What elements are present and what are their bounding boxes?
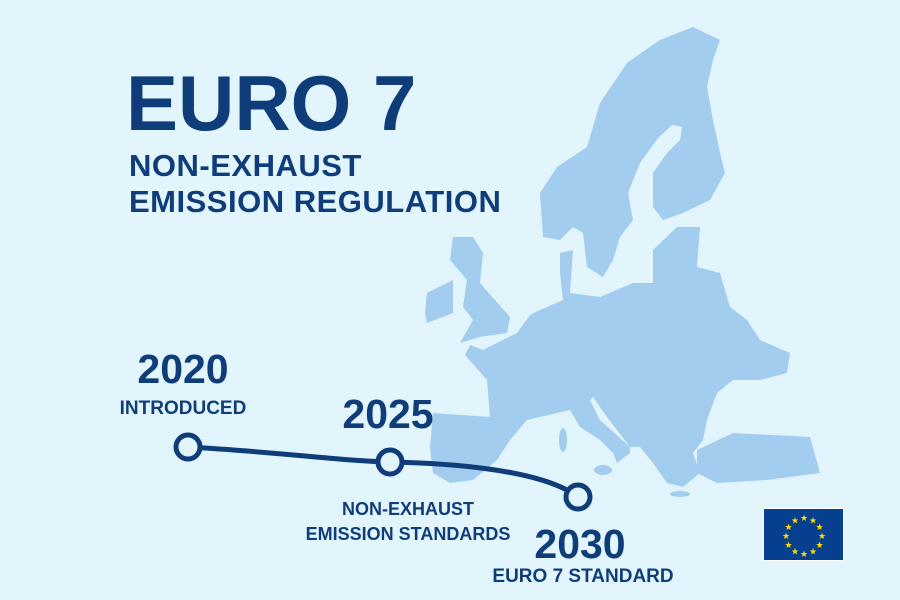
title: EURO 7 <box>126 59 416 147</box>
icon: EU flag: ★ <box>815 541 824 551</box>
label euro 7 standard: EURO 7 STANDARD <box>492 566 674 587</box>
icon: EU flag: ★ <box>809 516 817 526</box>
icon: EU flag: ★ <box>800 550 808 560</box>
label 2020 <box>120 346 246 419</box>
icon: EU flag: ★ <box>784 523 793 533</box>
icon: EU flag: ★ <box>818 532 826 542</box>
icon: EU flag <box>763 508 844 561</box>
label non-exhaust standards: EMISSION STANDARDS <box>306 524 510 544</box>
subtitle: NON-EXHAUST <box>129 148 362 183</box>
milestone 2030 <box>566 485 590 509</box>
icon: EU flag: ★ <box>782 532 790 542</box>
timeline line <box>188 447 578 497</box>
label 2030: 2030 <box>534 521 626 567</box>
milestone 2020 <box>176 435 200 459</box>
label 2025: 2025 <box>342 391 434 437</box>
subtitle: EMISSION REGULATION <box>129 184 501 219</box>
milestone 2025 <box>378 450 402 474</box>
icon: EU flag: ★ <box>791 516 799 526</box>
icon: EU flag: ★ <box>784 541 793 551</box>
label 2020: INTRODUCED <box>120 398 246 419</box>
icon: EU flag: ★ <box>809 548 817 558</box>
label non-exhaust standards: NON-EXHAUST <box>342 499 474 519</box>
subtitle <box>129 148 501 219</box>
label 2020: 2020 <box>137 346 229 392</box>
label non-exhaust standards <box>306 499 510 544</box>
icon: EU flag: ★ <box>791 548 799 558</box>
icon: EU flag: ★ <box>800 514 808 524</box>
icon: EU flag: ★ <box>815 523 824 533</box>
